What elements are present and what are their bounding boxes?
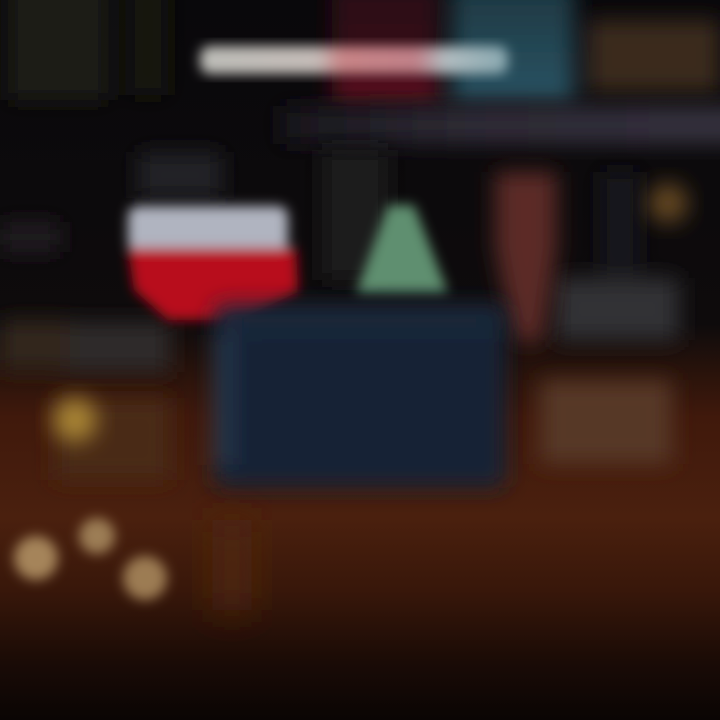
icon: orange label <box>648 183 688 223</box>
title <box>200 46 508 74</box>
icon: red and white tub <box>128 206 298 320</box>
shelf board <box>280 106 720 144</box>
icon: coins <box>14 518 167 600</box>
faint table mark <box>212 520 252 610</box>
icon: red bottle <box>495 172 557 342</box>
panel: right card <box>540 380 672 464</box>
icon: gold seal <box>53 398 97 442</box>
top shelf books <box>8 0 720 102</box>
panel: navy box <box>214 304 506 488</box>
background jars and bottles <box>0 150 679 372</box>
icon: green flask <box>356 205 448 293</box>
panel: left card <box>55 398 170 480</box>
